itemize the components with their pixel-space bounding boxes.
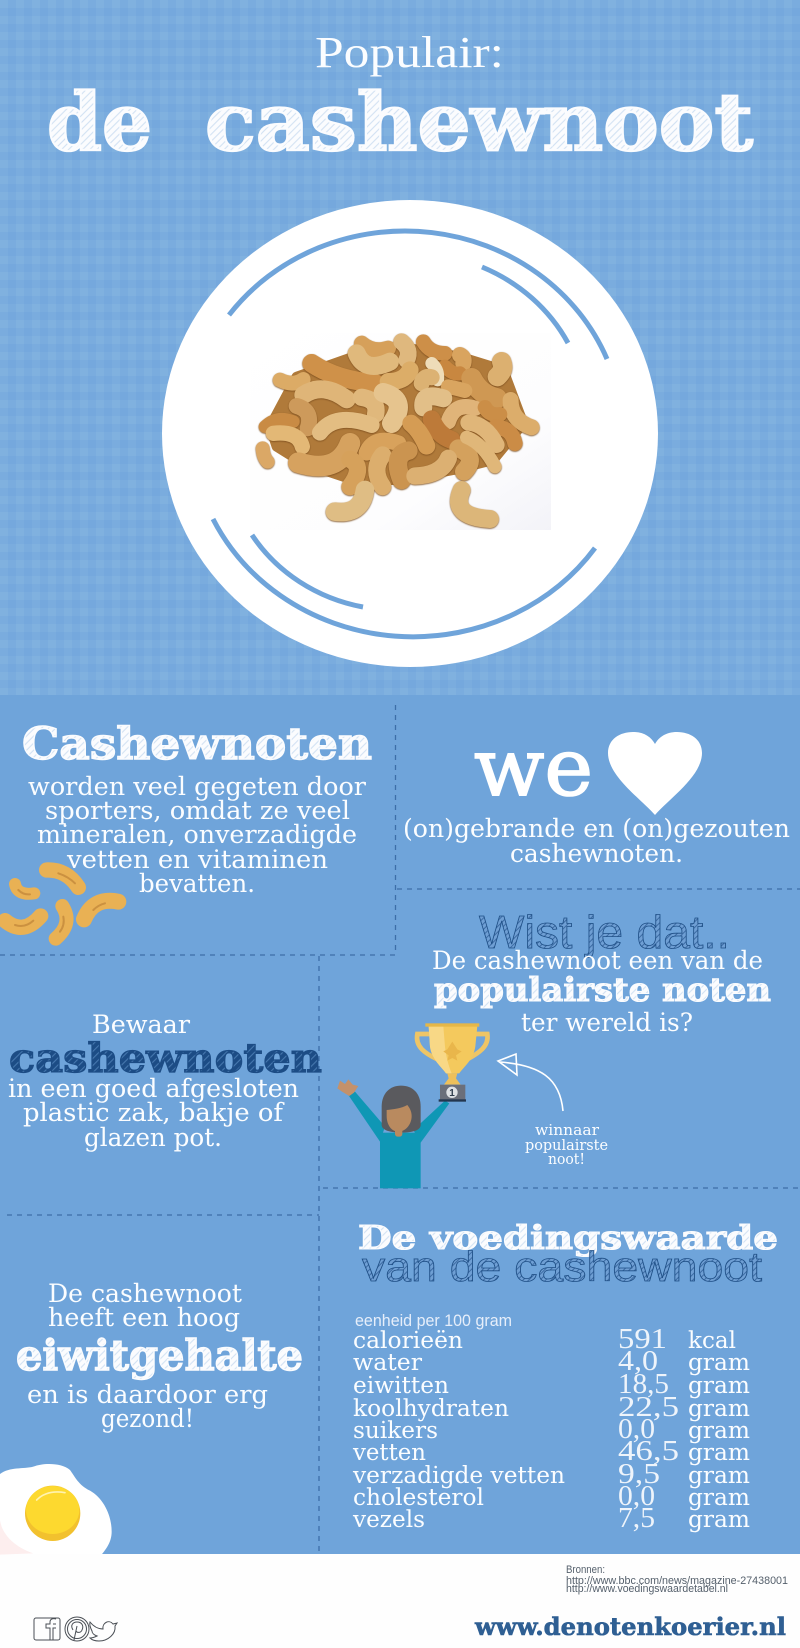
row values (618, 1324, 679, 1534)
icon: fried egg (0, 1464, 112, 1555)
row values: 18,5 (618, 1369, 669, 1400)
footer: sources (566, 1564, 788, 1595)
row values: 0,0 (618, 1481, 655, 1512)
arrow: points to trophy (498, 1054, 563, 1111)
title: de cashewnoot: cashewnoot (205, 75, 753, 169)
heading: Cashewnoten: Cashewnoten (22, 719, 372, 770)
blue content panel (0, 695, 800, 1554)
icon: heart (608, 732, 702, 815)
person (337, 1079, 449, 1188)
row labels: eiwitten (353, 1373, 449, 1399)
row labels: water (353, 1350, 422, 1376)
heading: van de cashewnoot: van de cashewnoot (362, 1243, 762, 1290)
row values: 22,5 (618, 1392, 679, 1423)
row labels: vezels (352, 1507, 425, 1533)
icon: pinterest (65, 1617, 89, 1641)
caption: winnaar populairste noot: noot! (548, 1152, 585, 1168)
text block: De cashewnoot een van de: De cashewnoot een van de (432, 946, 763, 975)
row values: 9,5 (618, 1459, 660, 1490)
icon: twitter (90, 1622, 117, 1641)
row values: 7,5 (618, 1503, 655, 1534)
text block: hoog: heeft een hoog (48, 1303, 240, 1332)
title: Populair: Populair: (315, 28, 504, 77)
row units: kcal (688, 1328, 736, 1354)
text block: sporters: vetten en vitaminen (66, 845, 328, 874)
row units: gram (688, 1440, 750, 1466)
row units: gram (688, 1350, 750, 1376)
row units (688, 1328, 750, 1533)
row labels: koolhydraten (353, 1396, 509, 1422)
row units: gram (688, 1485, 750, 1511)
footer: sources: http://www.bbc.com/news/magazine-27438001 (566, 1575, 788, 1587)
cashew pile photo (263, 342, 532, 519)
text block: ongebrande (403, 814, 790, 868)
panel: voedingswaarde (352, 1218, 778, 1534)
icon: trophy: 1 (449, 1088, 455, 1099)
row units: gram (688, 1396, 750, 1422)
heading: Wist je dat: Wist je dat.. (479, 906, 730, 958)
hero plate with cashews (162, 200, 658, 667)
text block: ter wereld is: ter wereld is? (521, 1008, 693, 1037)
heading: eiwitgehalte: eiwitgehalte (16, 1331, 303, 1380)
panel: we love (403, 721, 790, 868)
text block: afgesloten: in een goed afgesloten (8, 1074, 299, 1103)
footer: sources: Bronnen: (566, 1564, 605, 1576)
text block: gezond (27, 1380, 268, 1433)
panel: wist je dat (337, 906, 771, 1188)
panel: bewaar (8, 1010, 322, 1152)
title: de cashewnoot: de (47, 75, 152, 169)
white plate (162, 200, 658, 667)
footer: social icons (34, 1617, 117, 1641)
panel: Cashewnoten (5, 719, 372, 939)
text block: sporters: mineralen, onverzadigde (37, 820, 357, 849)
text block: hoog (48, 1279, 242, 1332)
row labels: calorieën (353, 1328, 463, 1354)
text block: gezond: en is daardoor erg (27, 1380, 268, 1409)
row values: 4,0 (618, 1346, 658, 1377)
photo backdrop (250, 333, 551, 530)
nutrition table (352, 1324, 750, 1534)
row values: 591 (618, 1324, 667, 1355)
text block: afgesloten (8, 1074, 299, 1152)
row labels: cholesterol (353, 1485, 484, 1511)
row labels (352, 1328, 565, 1533)
text block: hoog: De cashewnoot (48, 1279, 242, 1308)
row labels: suikers (353, 1418, 438, 1444)
row values: 0,0 (618, 1414, 655, 1445)
heading: populairste noten: populairste noten (434, 970, 771, 1009)
text block: afgesloten: plastic zak, bakje of (23, 1098, 285, 1127)
icon: facebook (34, 1618, 60, 1640)
plate arcs (213, 231, 607, 637)
icon: cashews (5, 870, 118, 939)
caption: winnaar populairste noot (525, 1123, 608, 1168)
text block: sporters: sporters, omdat ze veel (45, 796, 350, 825)
row values: 46,5 (618, 1436, 679, 1467)
text block: sporters: worden veel gegeten door (28, 772, 366, 801)
footer: sources: http://www.voedingswaardetabel.nl (566, 1583, 728, 1595)
caption: winnaar populairste noot: winnaar (535, 1123, 599, 1139)
text block: afgesloten: glazen pot. (84, 1123, 222, 1152)
text: Bewaar: Bewaar (92, 1010, 190, 1039)
text block: sporters (28, 772, 366, 898)
table note: eenheid per 100 gram: eenheid per 100 gram (355, 1311, 512, 1330)
caption: winnaar populairste noot: populairste (525, 1138, 608, 1154)
heading: cashewnoten: cashewnoten (9, 1035, 322, 1082)
footer: website url: www.denotenkoerier.nl (474, 1612, 786, 1641)
row units: gram (688, 1507, 750, 1533)
row units: gram (688, 1373, 750, 1399)
illustration: person with trophy (337, 1023, 488, 1188)
text block: ongebrande: cashewnoten. (510, 839, 683, 868)
text block: sporters: bevatten. (139, 869, 255, 898)
text block: gezond: gezond! (101, 1404, 194, 1433)
heading: De voedingswaarde: De voedingswaarde (358, 1218, 778, 1257)
row units: gram (688, 1418, 750, 1444)
section divider lines (0, 705, 800, 1552)
heading: we: we (474, 721, 593, 814)
row labels: verzadigde vetten (352, 1463, 565, 1489)
icon: trophy (417, 1023, 488, 1102)
row labels: vetten (352, 1440, 426, 1466)
panel: eiwitgehalte (0, 1279, 303, 1555)
row units: gram (688, 1463, 750, 1489)
plaid header background (0, 0, 800, 695)
text block: ongebrande: (on)gebrande en (on)gezouten (403, 814, 790, 843)
